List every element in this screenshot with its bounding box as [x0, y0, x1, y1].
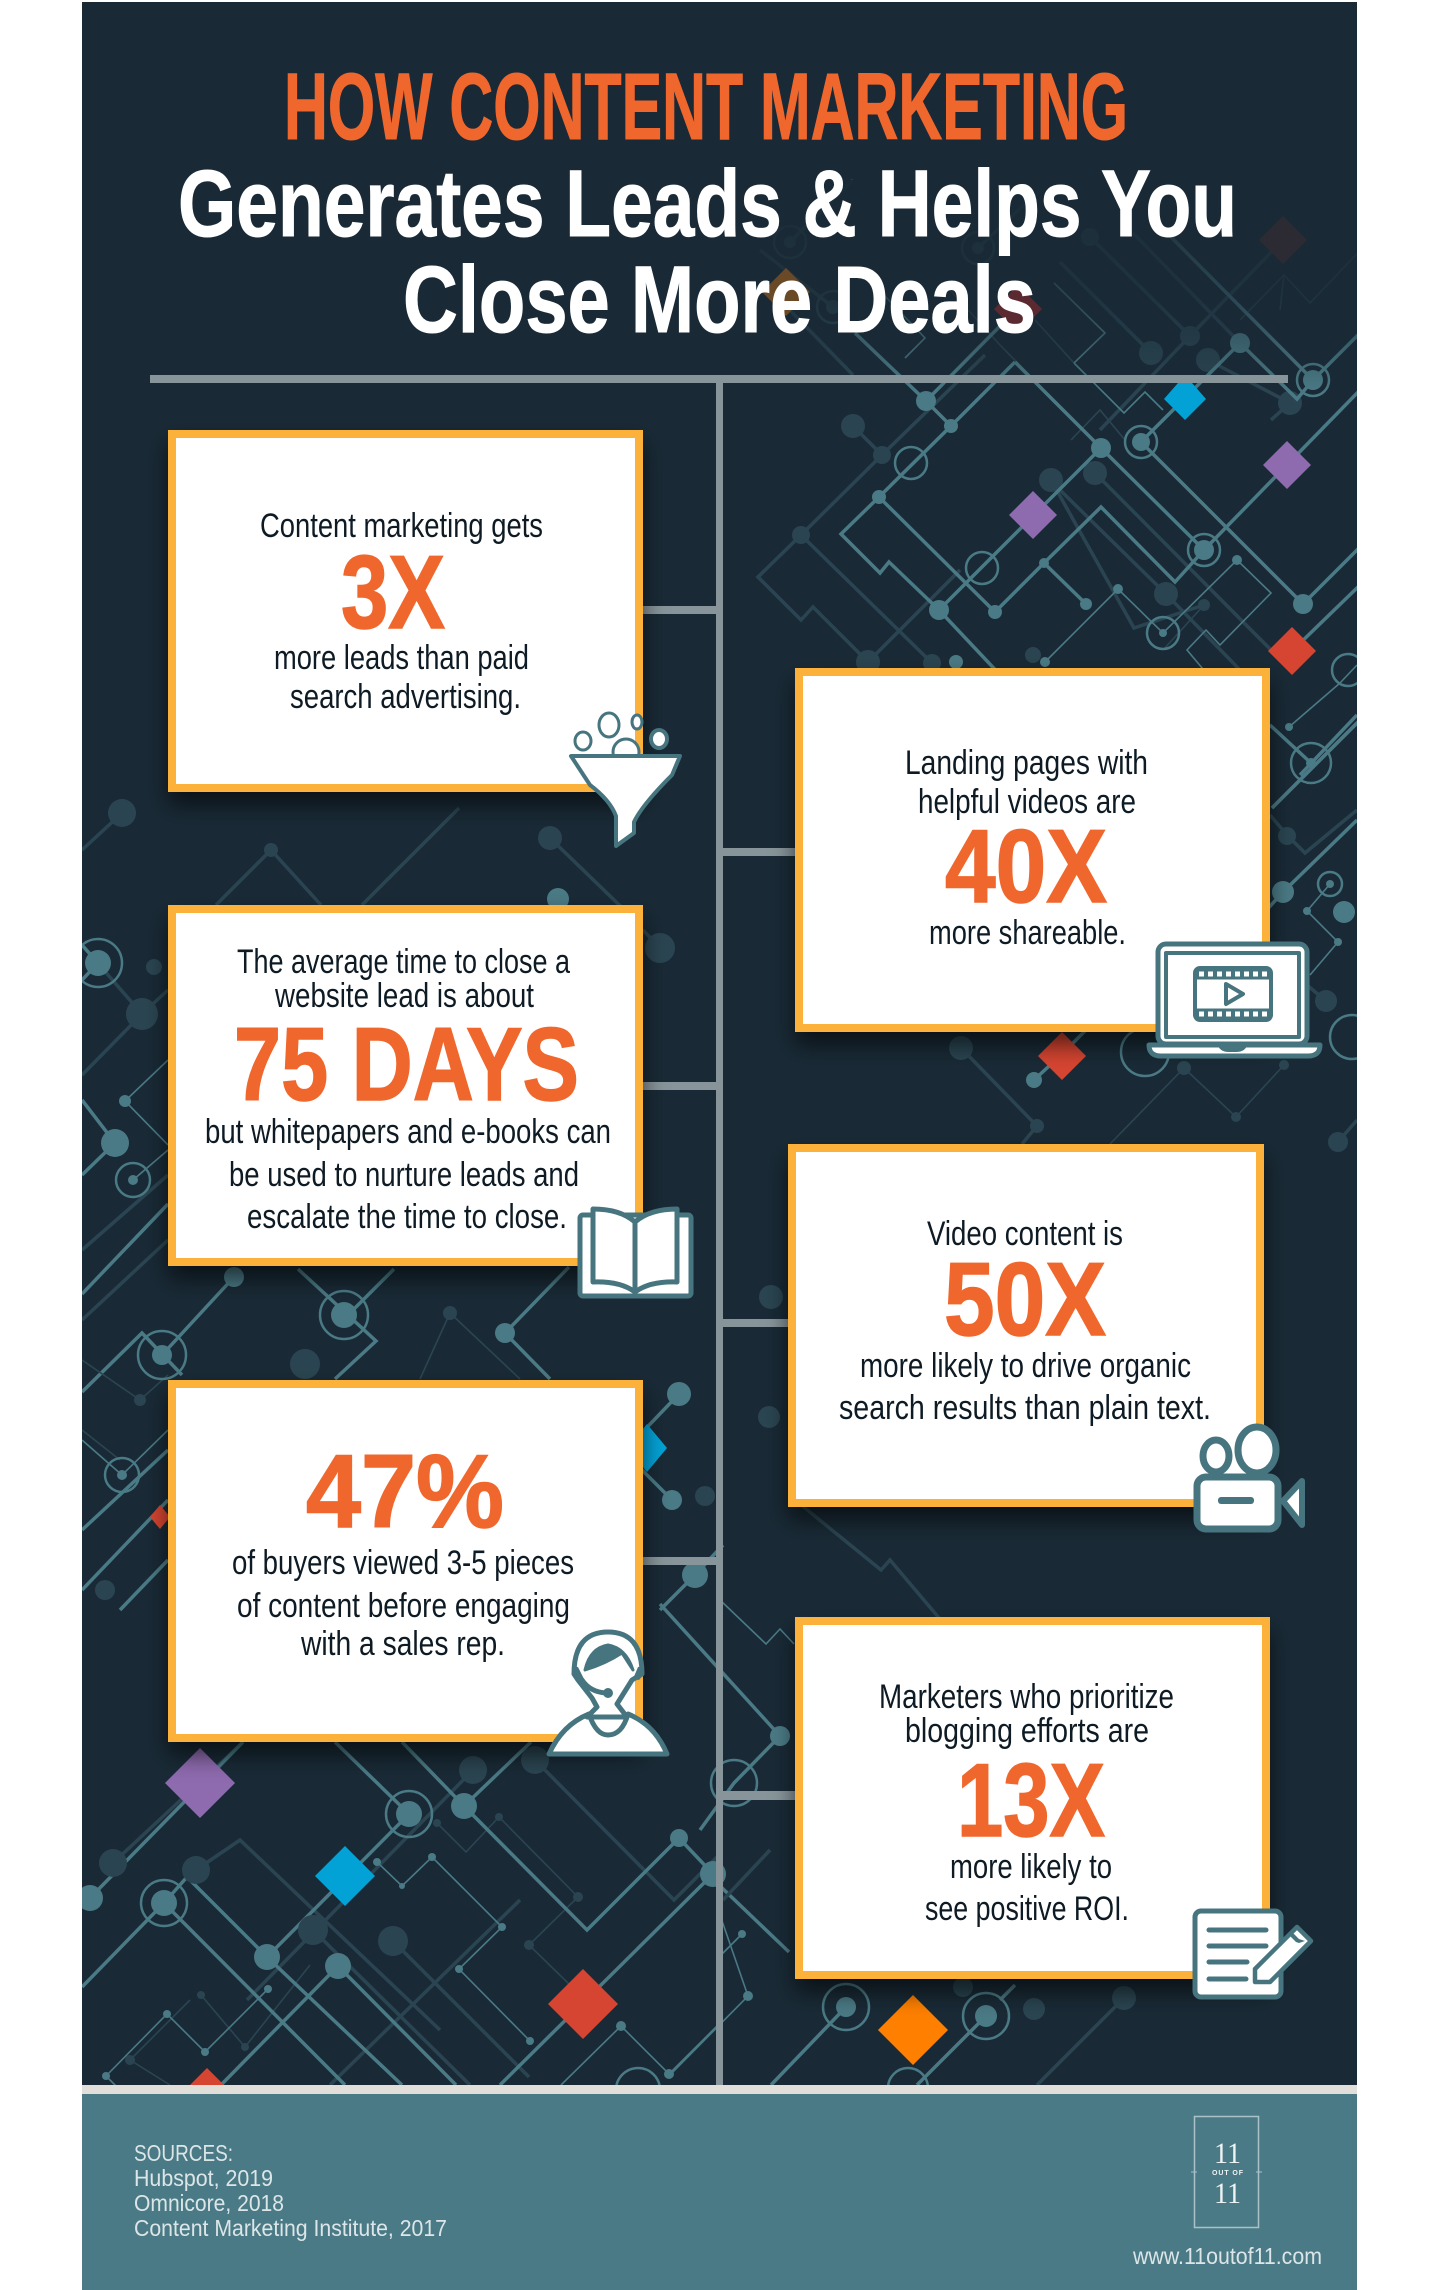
sources: SOURCES: — [134, 2140, 233, 2166]
icon: notepad and pencil — [1195, 1911, 1311, 1997]
lower-left circuits — [113, 1742, 717, 2085]
panel: 40X more shareable: helpful videos are — [918, 783, 1136, 821]
panel: 47% of buyers: of content before engaging — [237, 1587, 570, 1625]
logo: 11 out of 11: 11 — [1214, 2137, 1241, 2170]
panel: 75 days: website lead is about — [274, 977, 534, 1015]
sources: Content Marketing Institute, 2017 — [134, 2215, 447, 2241]
upper-right bright circuits — [841, 233, 1360, 808]
panel: 40X more shareable: Landing pages with — [905, 744, 1148, 782]
panel: 50X video content: more likely to drive organic — [860, 1347, 1191, 1385]
sources — [134, 2140, 447, 2241]
icon: open book — [580, 1209, 691, 1296]
panel: 3X more leads: search advertising. — [290, 678, 521, 716]
icon: video camera — [1197, 1427, 1302, 1529]
diamonds — [150, 216, 1316, 2088]
panel: 13X positive ROI: more likely to — [950, 1848, 1112, 1886]
logo: 11 out of 11 — [1191, 2116, 1262, 2228]
panel: 47% of buyers: with a sales rep. — [300, 1625, 505, 1663]
panel: 75 days: but whitepapers and e-books can — [205, 1113, 611, 1151]
timeline connector lines — [150, 375, 1288, 2085]
panel: 40X more shareable: more shareable. — [929, 914, 1126, 952]
panel: 47% of buyers: 47% — [306, 1434, 504, 1550]
panel: 40X more shareable: 40X — [945, 809, 1107, 925]
icon: customer service agent — [549, 1632, 667, 1754]
website url: www.11outof11.com — [1132, 2243, 1322, 2269]
panel: 13X positive ROI: Marketers who prioritize — [879, 1678, 1174, 1716]
panel: 3X more leads: 3X — [341, 535, 445, 651]
panel: 75 days: The average time to close a — [237, 943, 570, 981]
panel: 50X video content: Video content is — [927, 1215, 1123, 1253]
panel: 47% of buyers — [172, 1384, 639, 1738]
icon: laptop with video — [1149, 944, 1320, 1056]
background circuit pattern — [74, 180, 1374, 2112]
panel: 3X more leads: Content marketing gets — [260, 507, 543, 545]
panel: 75 days: be used to nurture leads and — [229, 1156, 579, 1194]
panel: 75 days: escalate the time to close. — [247, 1198, 567, 1236]
panel: 50X video content — [792, 1148, 1260, 1503]
panel: 40X more shareable — [799, 672, 1266, 1028]
panel: 75 days — [172, 909, 639, 1262]
logo: 11 out of 11: 11 — [1214, 2177, 1241, 2210]
footer band — [82, 2085, 1357, 2290]
panel: 13X positive ROI: blogging efforts are — [905, 1712, 1149, 1750]
title-zone fade over the pattern — [759, 180, 1357, 380]
title: Close More Deals — [403, 247, 1036, 353]
panel: 47% of buyers: of buyers viewed 3-5 pieces — [232, 1544, 574, 1582]
panel: 50X video content: search results than plain text. — [839, 1389, 1211, 1427]
left-middle circuits — [82, 808, 660, 1320]
panel: 75 days: 75 DAYS — [234, 1007, 579, 1123]
panel: 13X positive ROI — [799, 1621, 1266, 1975]
panel: 50X video content: 50X — [944, 1242, 1106, 1358]
lower-right circuits — [771, 1985, 1015, 2085]
panel: 13X positive ROI: 13X — [957, 1743, 1105, 1859]
logo: 11 out of 11: OUT OF — [1212, 2170, 1244, 2177]
panel: 13X positive ROI: see positive ROI. — [925, 1890, 1129, 1928]
panel: 3X more leads — [172, 434, 639, 788]
icon: funnel — [571, 713, 680, 846]
panel: 3X more leads: more leads than paid — [274, 639, 529, 677]
title — [178, 54, 1237, 353]
sources: Omnicore, 2018 — [134, 2190, 284, 2216]
sources: Hubspot, 2019 — [134, 2165, 273, 2191]
right edge circuits — [1289, 665, 1357, 975]
